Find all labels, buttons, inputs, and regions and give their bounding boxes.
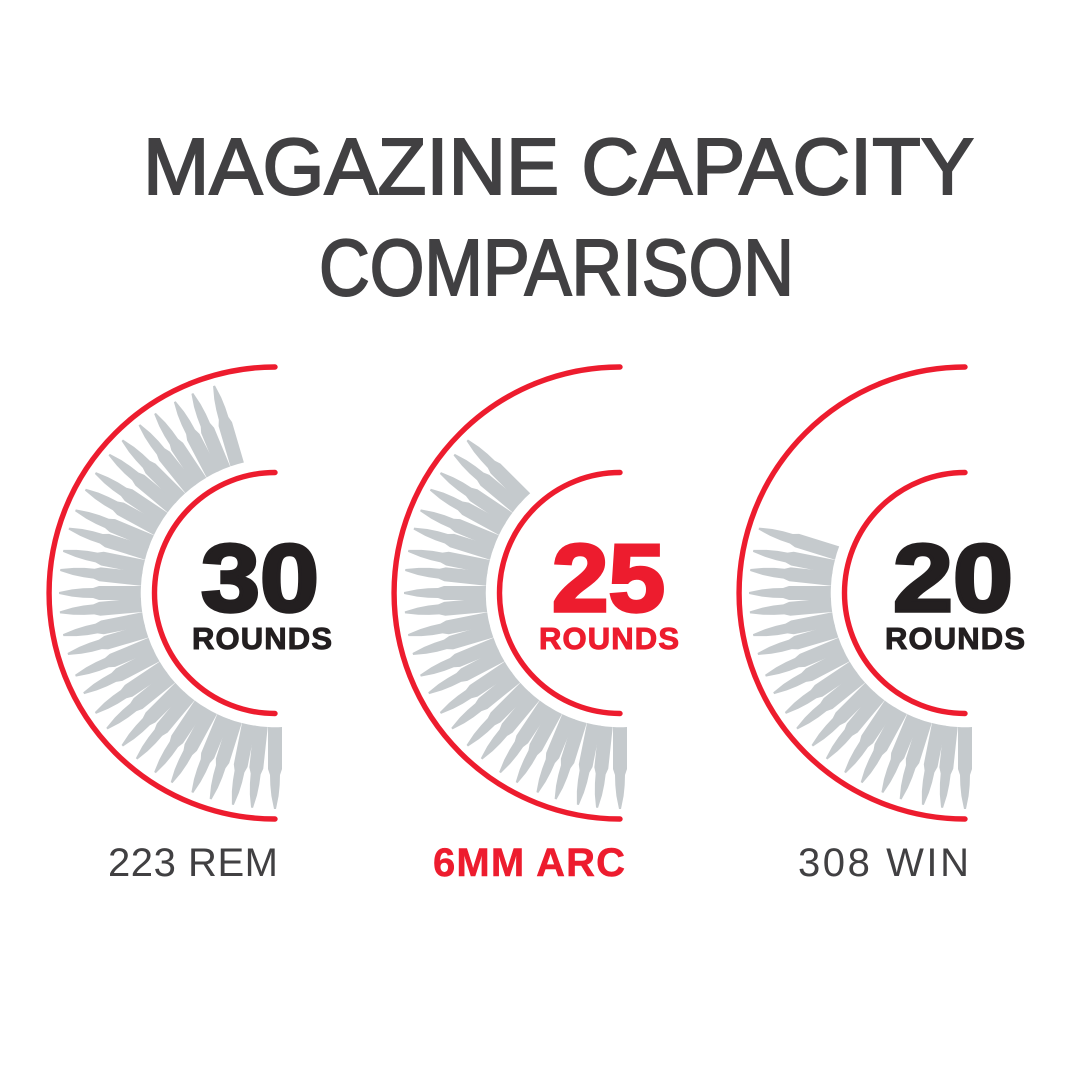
title: COMPARISON bbox=[319, 223, 794, 312]
bullets: 25 rounds bbox=[404, 435, 627, 809]
number: 30: 30 bbox=[201, 525, 319, 632]
outer arc bbox=[49, 367, 275, 819]
bullets: 30 rounds bbox=[59, 384, 282, 809]
panel: 6MM ARC bbox=[394, 367, 679, 885]
inner arc bbox=[844, 472, 965, 714]
bullets: 20 rounds bbox=[749, 522, 972, 809]
rounds label: ROUNDS bbox=[539, 621, 679, 656]
inner arc bbox=[155, 472, 275, 714]
panel: 308 WIN bbox=[739, 367, 1025, 885]
title: MAGAZINE CAPACITY bbox=[143, 122, 974, 211]
number: 25: 25 bbox=[552, 525, 665, 632]
outer arc bbox=[394, 367, 620, 819]
rounds label: ROUNDS bbox=[885, 621, 1025, 656]
panel: 223 REM bbox=[49, 367, 332, 885]
outer arc bbox=[739, 367, 965, 819]
caliber label: 308 WIN bbox=[798, 841, 969, 885]
number: 20: 20 bbox=[893, 525, 1013, 632]
title bbox=[143, 122, 974, 312]
rounds label: ROUNDS bbox=[192, 621, 332, 656]
inner arc bbox=[500, 472, 620, 714]
caliber label: 6MM ARC bbox=[433, 841, 625, 885]
caliber label: 223 REM bbox=[108, 841, 278, 885]
